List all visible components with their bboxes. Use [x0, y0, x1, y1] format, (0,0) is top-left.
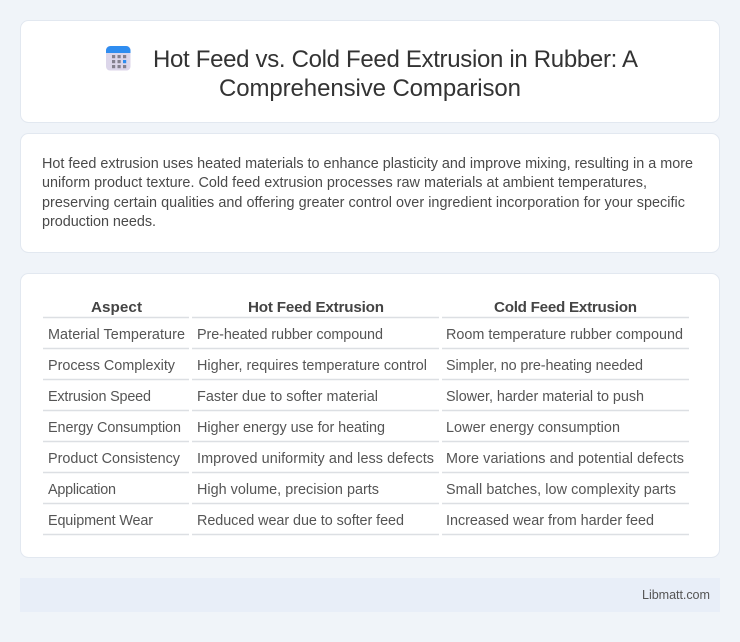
row: application: Application: [48, 482, 116, 498]
row: material temperature: [48, 327, 683, 343]
row: application: High volume, precision parts: [197, 482, 379, 498]
row: extrusion speed: Faster due to softer material: [197, 389, 378, 405]
row: product consistency: Product Consistency: [48, 451, 181, 467]
row: extrusion speed: Slower, harder material to push: [446, 389, 644, 405]
row: equipment wear: [48, 513, 654, 529]
title: Hot Feed vs. Cold Feed Extrusion in Rubber: A: [153, 46, 638, 73]
panel: introduction: [20, 134, 720, 252]
table header: Cold Feed Extrusion: [494, 299, 637, 316]
text block: introduction: [42, 156, 693, 230]
text block: introduction: preserving certain qualities and offering greater control over ingredient incorporation for your specific: [42, 195, 685, 211]
panel: comparison table: [20, 274, 720, 558]
row: process complexity: Higher, requires temperature control: [197, 358, 427, 374]
table header: [91, 299, 637, 316]
row: equipment wear: Increased wear from harder feed: [446, 513, 654, 529]
row: equipment wear: Equipment Wear: [48, 513, 153, 529]
row: material temperature: Material Temperature: [48, 327, 185, 343]
footer credit: Libmatt.com: [642, 588, 710, 602]
panel: title card: [20, 20, 720, 122]
icon: calendar: [106, 46, 130, 70]
row: application: [48, 482, 676, 498]
row: process complexity: Process Complexity: [48, 358, 176, 374]
row: process complexity: [48, 358, 643, 374]
text block: introduction: uniform product texture. Cold feed extrusion processes raw materials at ambient temperatures,: [42, 175, 647, 191]
row: product consistency: More variations and potential defects: [446, 451, 684, 467]
row: energy consumption: Higher energy use for heating: [197, 420, 385, 436]
row: product consistency: Improved uniformity and less defects: [197, 451, 434, 467]
row: equipment wear: Reduced wear due to softer feed: [197, 513, 404, 529]
row: energy consumption: Lower energy consumption: [446, 420, 620, 436]
row: product consistency: [48, 451, 684, 467]
row: energy consumption: Energy Consumption: [48, 420, 181, 436]
row: extrusion speed: Extrusion Speed: [48, 389, 151, 405]
row: material temperature: Room temperature rubber compound: [446, 327, 683, 343]
text block: introduction: Hot feed extrusion uses heated materials to enhance plasticity and improve mixing, resulting in a more: [42, 156, 693, 172]
row: material temperature: Pre-heated rubber compound: [197, 327, 383, 343]
text block: introduction: production needs.: [42, 214, 156, 230]
row: energy consumption: [48, 420, 620, 436]
table header: Aspect: [91, 299, 142, 316]
title: Comprehensive Comparison: [219, 75, 521, 102]
row: process complexity: Simpler, no pre-heating needed: [446, 358, 643, 374]
title: [153, 46, 638, 102]
footer: [20, 578, 720, 612]
row: application: Small batches, low complexity parts: [446, 482, 676, 498]
table header: Hot Feed Extrusion: [248, 299, 384, 316]
row: extrusion speed: [48, 389, 644, 405]
